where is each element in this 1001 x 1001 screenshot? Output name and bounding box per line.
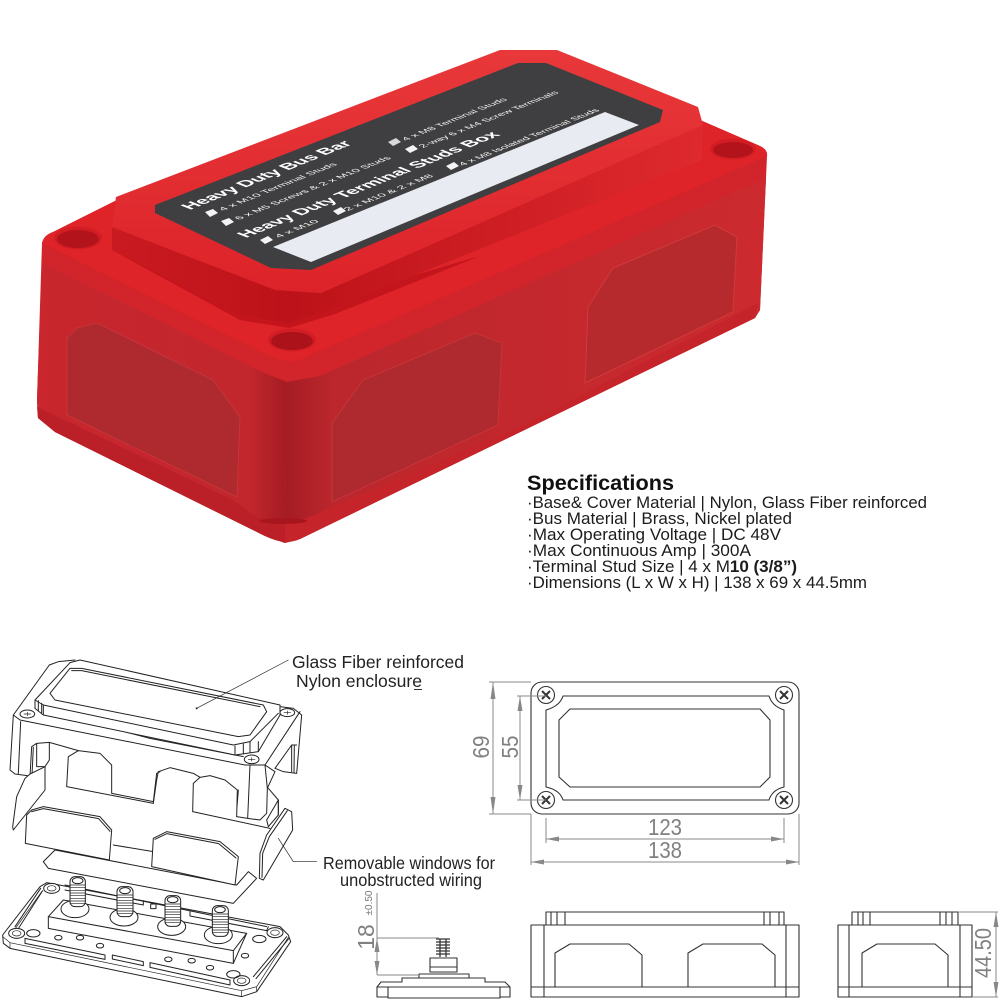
front view bbox=[531, 912, 799, 997]
stud washer bbox=[430, 967, 457, 972]
lower window sheet bbox=[43, 850, 257, 903]
right leg slot bbox=[275, 745, 297, 773]
checkbox 6xM5 bbox=[221, 218, 234, 226]
callout line two: unobstructed wiring bbox=[340, 870, 482, 890]
option 4xM8 studs: 4 x M8 Terminal Studs bbox=[399, 97, 510, 142]
dimension 123: 123 bbox=[648, 814, 682, 840]
stud nut bbox=[430, 958, 457, 967]
cover white silhouette bbox=[10, 661, 302, 820]
window left bbox=[555, 944, 642, 987]
housing body bbox=[838, 925, 972, 997]
specifications heading: Specifications bbox=[527, 471, 674, 495]
dimension 18: 18 bbox=[353, 924, 379, 950]
small plate holes bbox=[27, 904, 266, 978]
flange back right corner bbox=[49, 660, 302, 773]
top face of box bbox=[42, 120, 767, 361]
dimension 138: 138 bbox=[648, 837, 682, 863]
callout: glass fiber enclosure bbox=[292, 652, 464, 691]
connector line between windows bbox=[113, 845, 153, 852]
left leg cut-out bbox=[30, 742, 78, 776]
dimension 55 bbox=[497, 696, 546, 800]
callout line two: Nylon enclosure bbox=[296, 671, 422, 691]
enclosure cover bbox=[10, 660, 302, 828]
flange upper front edge bbox=[35, 708, 243, 757]
label text bbox=[176, 90, 602, 244]
window hump B bbox=[152, 832, 238, 885]
removable window panels bbox=[13, 767, 317, 903]
screw hole right bbox=[710, 138, 756, 160]
shadow under lid bbox=[112, 235, 480, 328]
heading: Heavy Duty Terminal Studs Box: Heavy Duty Terminal Studs Box bbox=[232, 129, 505, 239]
plate outline bbox=[3, 883, 291, 997]
stud threads bbox=[436, 939, 450, 957]
spec: stud size: ·Terminal Stud Size | 4 x M 10 (3/8”) bbox=[527, 558, 797, 576]
callout: removable windows bbox=[323, 853, 495, 890]
window centre bbox=[332, 333, 502, 502]
label recess bbox=[559, 709, 770, 787]
leader line to window bbox=[278, 838, 317, 862]
plate inner rim bbox=[3, 892, 288, 997]
product photo: red bus bar box bbox=[37, 50, 767, 543]
spec: voltage: ·Max Operating Voltage | DC 48V bbox=[527, 526, 781, 544]
hump opening right bbox=[193, 776, 270, 828]
bottom band, left bbox=[37, 407, 285, 543]
flange outer outline and left leg bbox=[10, 665, 300, 776]
base body bbox=[377, 978, 510, 998]
dimension 18 bbox=[353, 890, 439, 975]
option 4xM10 box: 4 x M10 bbox=[272, 219, 322, 239]
lid outline bbox=[546, 696, 784, 800]
checkbox 4xM10 box bbox=[260, 236, 273, 244]
dimension 138 bbox=[531, 814, 799, 865]
leader line to enclosure bbox=[197, 660, 288, 708]
plate long slots bbox=[15, 885, 289, 985]
side tab left bbox=[13, 767, 45, 830]
checkbox 4xM8 isolated bbox=[446, 162, 459, 170]
spec: dimensions: ·Dimensions (L x W x H) | 138 x 69 x 44.5mm bbox=[527, 574, 867, 592]
checkbox 2-way bbox=[405, 145, 418, 153]
top opening edge centre bbox=[153, 768, 200, 803]
box silhouette underlay bbox=[37, 120, 767, 542]
dimension 44.50 bbox=[958, 912, 998, 997]
lid top edge bbox=[35, 700, 278, 745]
callout line one: Glass Fiber reinforced bbox=[292, 652, 464, 672]
bottom slot bbox=[259, 518, 307, 524]
checkbox 2xM10 bbox=[333, 207, 346, 215]
dark label plate bbox=[155, 63, 663, 270]
white write-on strip bbox=[273, 112, 639, 262]
dimension 69: 69 bbox=[468, 736, 494, 758]
bus bar block bbox=[419, 974, 469, 982]
stud 1 bbox=[61, 877, 89, 918]
lid inner panel bbox=[50, 668, 267, 737]
spec: bus material: ·Bus Material | Brass, Nickel plated bbox=[527, 510, 792, 528]
dimension 44.50: 44.50 bbox=[970, 928, 996, 978]
screw hole back left bbox=[54, 226, 102, 250]
stud 2 bbox=[110, 887, 138, 926]
option 2xM10 2xM8: 2 x M10 & 2 x M8 bbox=[341, 173, 436, 212]
top view dimension drawing bbox=[468, 682, 799, 865]
corner screws bbox=[538, 686, 792, 808]
right face of box bbox=[285, 178, 766, 543]
stud side view with height dimension bbox=[353, 890, 510, 998]
window hump A bbox=[25, 807, 112, 860]
stud 4 bbox=[204, 906, 232, 944]
checked checkbox 4xM8 bbox=[388, 138, 401, 146]
dimension 18: ±0.50 bbox=[364, 890, 375, 915]
left face of box bbox=[37, 262, 287, 543]
spec: material: ·Base& Cover Material | Nylon, Glass Fiber reinforced bbox=[527, 494, 927, 512]
dimension 123 bbox=[546, 814, 784, 843]
exploded view drawing bbox=[3, 660, 317, 997]
near corner pillar bbox=[237, 765, 275, 820]
specifications text block bbox=[527, 471, 927, 592]
back window behind cover, right bbox=[267, 800, 278, 827]
stud 3 bbox=[158, 896, 186, 935]
window bbox=[862, 944, 948, 987]
option 6xM5: 6 x M5 Screws & 2 x M10 Studs bbox=[232, 155, 394, 221]
housing body bbox=[531, 925, 799, 997]
spec: amps: ·Max Continuous Amp | 300A bbox=[527, 542, 751, 560]
hump opening left bbox=[67, 751, 160, 803]
lid raised plate bbox=[35, 660, 280, 755]
end view bbox=[838, 912, 998, 997]
window right bbox=[688, 944, 775, 987]
lid side wall bbox=[112, 125, 703, 323]
option 2-way: 2-way 6 x M4 Screw Terminals bbox=[416, 90, 562, 149]
underline mark under final letter bbox=[414, 688, 422, 690]
mount holes bbox=[9, 883, 283, 986]
brass bus bar bbox=[48, 900, 247, 963]
option 4xM8 isolated: 4 x M8 Isolated Terminal Studs bbox=[456, 107, 602, 167]
lid strip bbox=[546, 912, 784, 925]
dimension 69 bbox=[468, 682, 531, 814]
callout line one: Removable windows for bbox=[323, 853, 495, 873]
lid top surface bbox=[112, 50, 703, 293]
lid ribs bbox=[38, 701, 258, 755]
heading: Heavy Duty Bus Bar: Heavy Duty Bus Bar bbox=[176, 138, 357, 211]
rear wall curve bbox=[268, 788, 278, 815]
outer housing outline bbox=[531, 682, 799, 814]
lid strip bbox=[852, 912, 958, 925]
dimension 55: 55 bbox=[497, 736, 523, 758]
window left bbox=[67, 323, 240, 497]
right side tab bbox=[259, 808, 293, 880]
bottom band, right bbox=[285, 303, 758, 543]
checkbox 4xM10 bbox=[205, 209, 218, 217]
base plate with studs bbox=[3, 877, 291, 997]
option 4xM10 studs: 4 x M10 Terminal Studs bbox=[216, 161, 340, 212]
cover screw heads bbox=[20, 709, 295, 764]
screw hole front bbox=[268, 328, 316, 352]
window right bbox=[585, 225, 737, 383]
